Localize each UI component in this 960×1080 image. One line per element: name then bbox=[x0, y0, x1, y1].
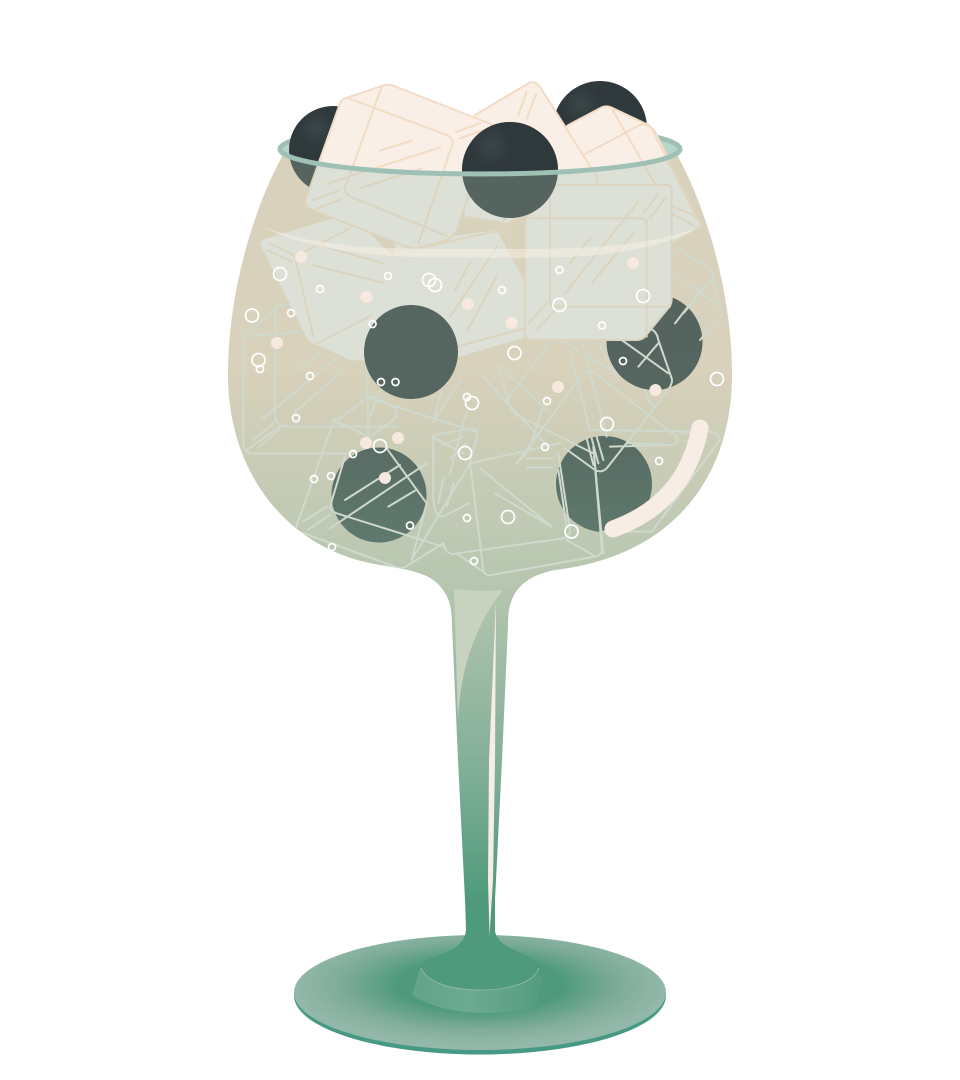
back of rim bbox=[280, 124, 680, 174]
illustration: cocktail glass bbox=[228, 81, 732, 1054]
front of rim bbox=[280, 149, 680, 174]
white ring bubbles bbox=[246, 266, 724, 564]
cream bubbles bbox=[271, 251, 662, 484]
curved glass highlight bbox=[613, 428, 700, 529]
foot collar bbox=[412, 965, 543, 1013]
stem cream highlight bbox=[488, 600, 496, 936]
berry: right, submerged bbox=[606, 294, 702, 390]
liquid contents bbox=[242, 159, 723, 576]
berry: lower right bbox=[556, 436, 652, 532]
centre ice block, submerged bbox=[357, 230, 525, 360]
berry: lower left bbox=[332, 448, 426, 542]
submerged ice outlines bbox=[243, 247, 722, 575]
berry left, below rim bbox=[290, 159, 316, 187]
square ice block bbox=[525, 185, 672, 340]
left ice block, submerged bbox=[260, 218, 392, 361]
waterline highlight bbox=[262, 226, 702, 258]
ice above rim bbox=[318, 81, 668, 172]
berry: centre submerged bbox=[364, 305, 458, 399]
foot of stem bbox=[420, 930, 539, 990]
bowl and stem bbox=[228, 155, 732, 936]
front berry bbox=[462, 122, 558, 218]
berries behind ice above rim bbox=[289, 81, 647, 162]
stem top highlight bbox=[454, 589, 503, 722]
upper ice, below waterline bbox=[306, 160, 700, 250]
base of glass bbox=[294, 935, 666, 1054]
